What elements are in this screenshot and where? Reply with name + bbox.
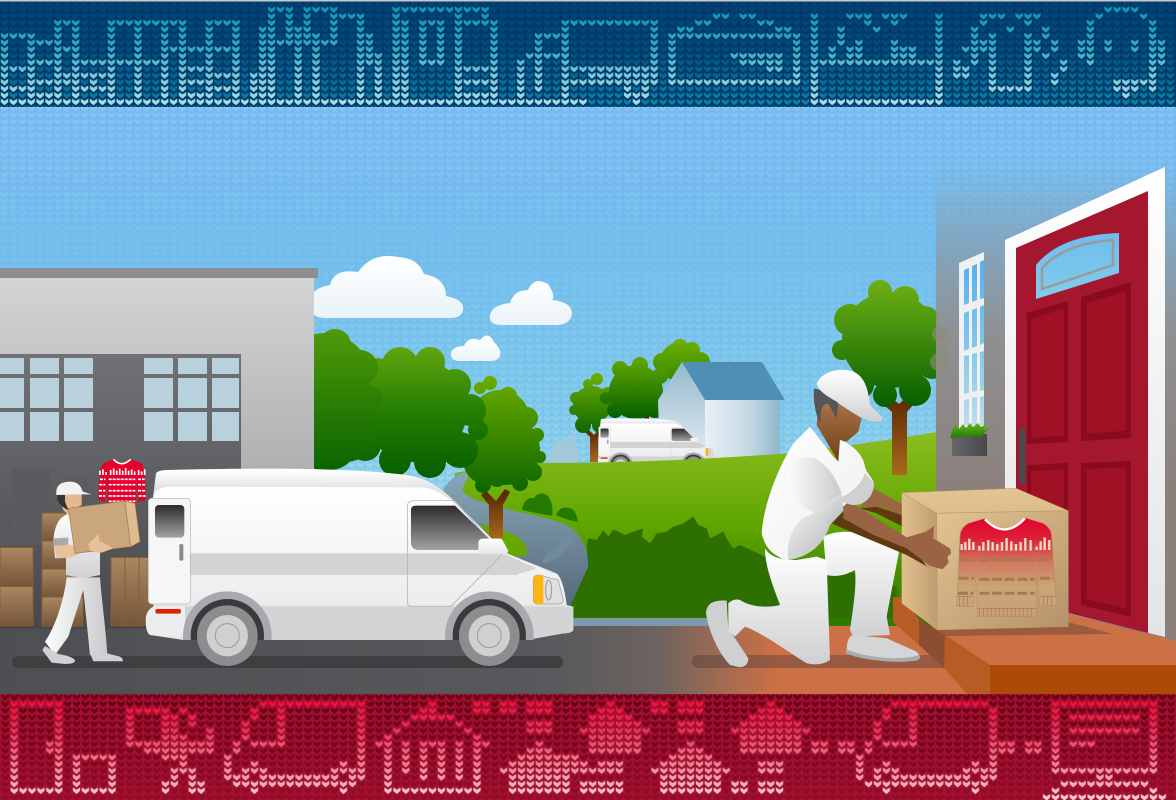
shoulder shading <box>837 473 874 505</box>
hedge bushes and dark lawn <box>570 517 897 618</box>
building <box>0 268 318 629</box>
river path <box>430 472 589 618</box>
shirt <box>53 514 100 578</box>
sky background <box>0 107 1176 490</box>
far trees behind house <box>569 339 710 462</box>
far arm <box>860 488 902 526</box>
knitted skyline motifs <box>0 2 1176 107</box>
shoes <box>42 646 123 664</box>
worker carrying box <box>42 482 140 664</box>
delivery van <box>146 469 573 680</box>
sleeve cuff <box>815 494 843 525</box>
back shoe <box>706 601 748 667</box>
warehouse boxes <box>0 513 153 626</box>
clouds <box>310 256 572 361</box>
front steps <box>893 597 1176 694</box>
lawn patch by river <box>480 523 527 558</box>
near arm and hand <box>843 501 951 569</box>
cap <box>56 482 92 495</box>
box sweater graphic <box>957 518 1057 617</box>
city silhouette inside building <box>0 469 100 545</box>
shirt <box>762 427 874 560</box>
sidewalk strip <box>572 618 712 627</box>
arm <box>54 534 113 558</box>
house wall <box>930 165 1176 641</box>
window planter <box>950 423 992 456</box>
hair <box>814 388 838 423</box>
front leg <box>823 532 900 637</box>
right tree <box>832 280 946 475</box>
headlight <box>533 575 563 604</box>
near arm shadow <box>832 512 933 570</box>
kneeling leg <box>728 548 830 664</box>
knitted neighbourhood motifs <box>0 694 1176 800</box>
background tree left <box>280 329 383 471</box>
kneeling worker <box>706 370 951 667</box>
tail light <box>155 609 181 614</box>
background tree centre <box>344 347 488 480</box>
green hill <box>455 432 937 626</box>
wheels <box>183 591 534 680</box>
road and pavement <box>0 626 1176 694</box>
van stripe <box>190 553 518 575</box>
small shrubs <box>522 493 578 522</box>
neck and face <box>817 403 862 462</box>
top knitted band <box>0 0 1176 107</box>
bottom knitted band <box>0 694 1176 800</box>
upper sleeve <box>787 457 842 513</box>
side window <box>959 252 984 430</box>
transom window <box>1036 233 1119 299</box>
front shoe <box>847 635 919 661</box>
tree with trunk by river <box>463 376 546 540</box>
rear door <box>148 498 190 604</box>
lower shirt fold <box>788 513 830 560</box>
delivery box on step <box>902 488 1068 630</box>
sweater icon above worker <box>98 459 146 505</box>
van lower body <box>183 607 573 640</box>
front door <box>1005 167 1165 637</box>
side door and window <box>407 501 502 607</box>
head <box>57 493 82 515</box>
hand <box>88 534 113 553</box>
distant van <box>598 418 717 477</box>
distant silhouette house <box>541 435 579 463</box>
side mirror <box>478 539 508 554</box>
pants <box>45 577 107 655</box>
cap <box>817 370 882 422</box>
road shadows <box>12 655 954 668</box>
door panels <box>1027 282 1131 617</box>
door handle <box>1019 429 1026 484</box>
far house <box>658 362 785 462</box>
box held <box>68 501 131 553</box>
